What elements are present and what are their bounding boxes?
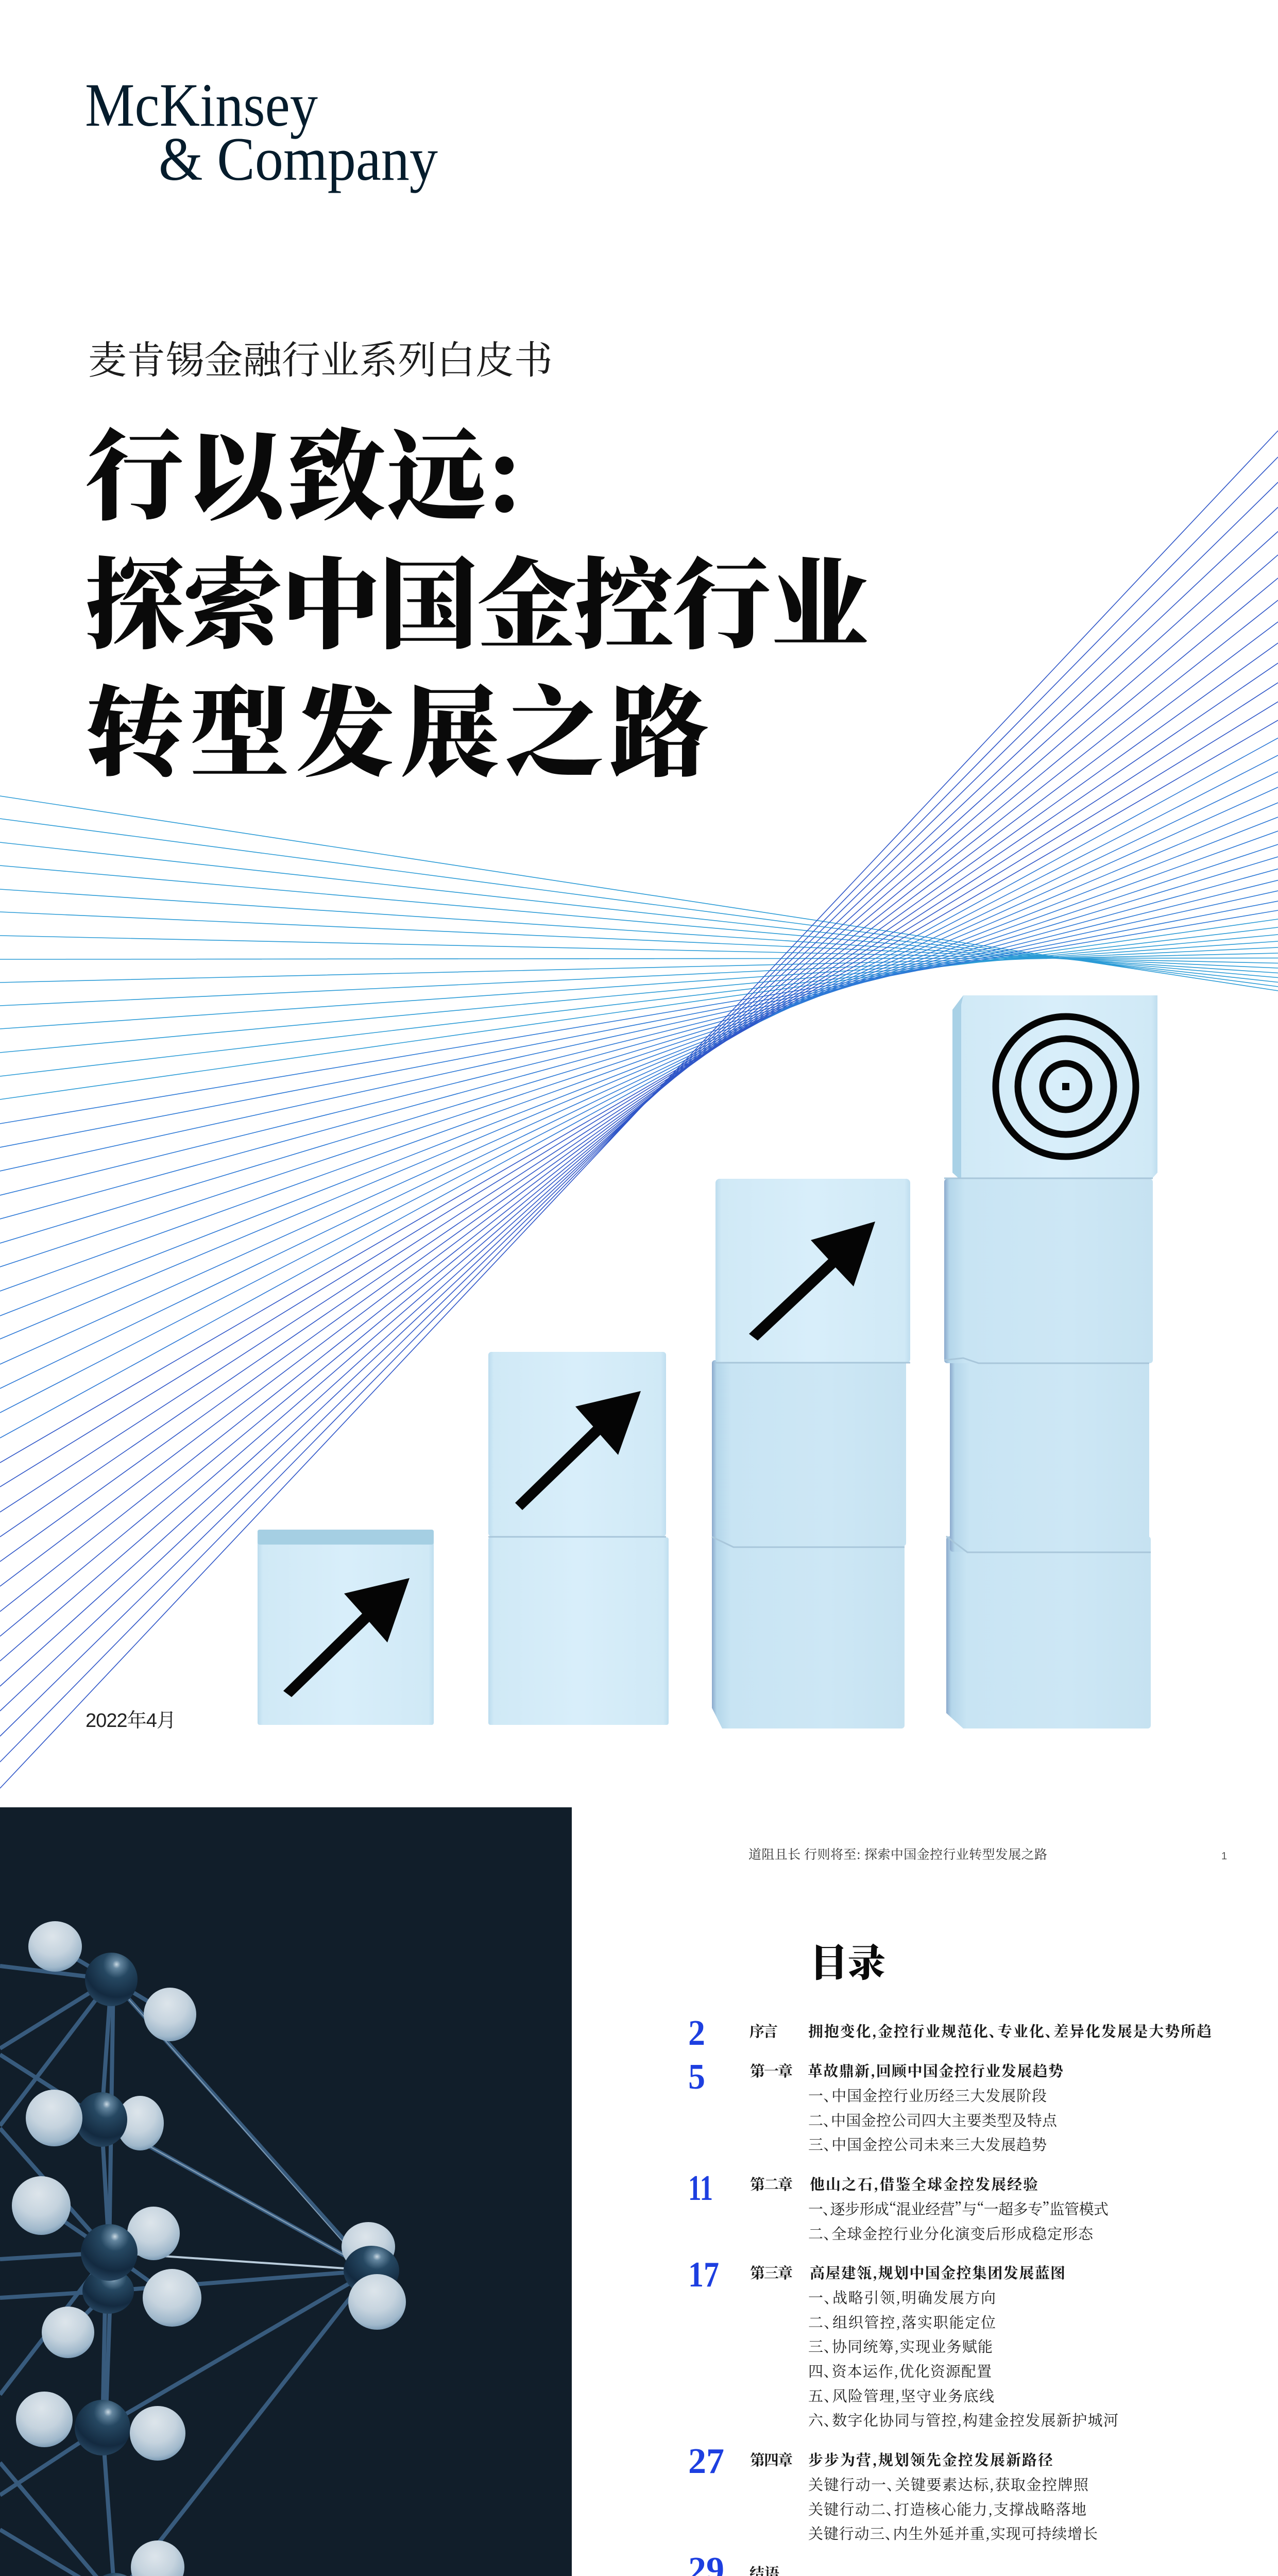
main title: 探索中国金控行业 (86, 526, 870, 668)
toc: chapter three: 五、风险管理,坚守业务底线 (808, 2385, 994, 2406)
toc: preface: 序言 (749, 2020, 778, 2041)
toc: chapter four: 第四章 (750, 2449, 793, 2470)
toc: chapter one: 5 (688, 2057, 705, 2097)
running header: contents page: 道阻且长 行则将至: 探索中国金控行业转型发展之路 (748, 1844, 1047, 1863)
column 3 blocks with arrow (712, 1179, 910, 1728)
toc: chapter four: 关键行动一、关键要素达标,获取金控牌照 (808, 2473, 1089, 2495)
main title: 转型发展之路 (86, 654, 709, 796)
toc: chapter three: 高屋建瓴,规划中国金控集团发展蓝图 (810, 2262, 1065, 2283)
toc: preface (688, 2013, 1212, 2053)
toc: chapter one: 第一章 (750, 2060, 793, 2081)
molecule rods (0, 1946, 371, 2576)
logo: McKinsey & Company: McKinsey (85, 71, 318, 139)
table of contents (688, 2013, 1212, 2576)
toc: chapter three: 三、协同统筹,实现业务赋能 (808, 2335, 993, 2357)
toc: chapter two: 一、逐步形成“混业经营”与“一超多专”监管模式 (808, 2198, 1109, 2219)
toc: chapter four: 关键行动二、打造核心能力,支撑战略落地 (808, 2498, 1086, 2519)
toc: chapter one: 三、中国金控公司未来三大发展趋势 (808, 2133, 1047, 2155)
molecule balls (12, 1921, 406, 2576)
toc: chapter one (688, 2057, 1063, 2155)
column 1 block with arrow (258, 1530, 434, 1725)
column 2 blocks with arrow (488, 1352, 669, 1725)
date: 2022年4月 (86, 1710, 176, 1732)
toc: chapter two: 第二章 (750, 2173, 793, 2194)
toc: chapter three: 二、组织管控,落实职能定位 (808, 2311, 996, 2332)
cover: blended line wave (0, 431, 1278, 1788)
subtitle: 麦肯锡金融行业系列白皮书 (88, 330, 553, 385)
toc: chapter three (688, 2255, 1118, 2430)
toc: chapter one: 二、中国金控公司四大主要类型及特点 (808, 2109, 1058, 2130)
toc: preface: 2 (688, 2013, 705, 2053)
heading: contents: 目录 (810, 1933, 885, 1988)
toc: chapter four (688, 2442, 1098, 2544)
main title (86, 397, 870, 796)
page number 1: 1 (1221, 1851, 1227, 1862)
column 4 blocks with target (944, 995, 1157, 1728)
cover image: stacked wooden blocks (258, 995, 1157, 1728)
toc: chapter three: 17 (688, 2255, 719, 2295)
logo: McKinsey & Company: & Company (159, 125, 438, 193)
toc: chapter three: 六、数字化协同与管控,构建金控发展新护城河 (808, 2409, 1118, 2430)
toc: chapter four: 27 (688, 2442, 724, 2481)
toc: chapter two: 二、全球金控行业分化演变后形成稳定形态 (808, 2223, 1094, 2244)
toc: chapter three: 一、战略引领,明确发展方向 (808, 2286, 996, 2308)
toc: chapter three: 第三章 (750, 2262, 793, 2283)
toc: chapter two: 他山之石,借鉴全球金控发展经验 (810, 2173, 1038, 2194)
toc: conclusion (688, 2550, 779, 2576)
toc: chapter one: 一、中国金控行业历经三大发展阶段 (808, 2084, 1047, 2106)
toc: chapter one: 革故鼎新,回顾中国金控行业发展趋势 (808, 2060, 1063, 2081)
toc: preface: 拥抱变化,金控行业规范化、专业化、差异化发展是大势所趋 (808, 2020, 1212, 2041)
panel: dark molecule image (0, 1807, 572, 2576)
toc: chapter four: 关键行动三、内生外延并重,实现可持续增长 (808, 2522, 1098, 2544)
icon: target (996, 1016, 1136, 1157)
toc: chapter two (688, 2168, 1109, 2244)
toc: chapter two: 11 (688, 2168, 713, 2208)
toc: chapter three: 四、资本运作,优化资源配置 (808, 2360, 992, 2381)
toc: chapter four: 步步为营,规划领先金控发展新路径 (808, 2449, 1053, 2470)
logo: McKinsey & Company (85, 71, 438, 193)
main title: 行以致远: (86, 397, 521, 539)
